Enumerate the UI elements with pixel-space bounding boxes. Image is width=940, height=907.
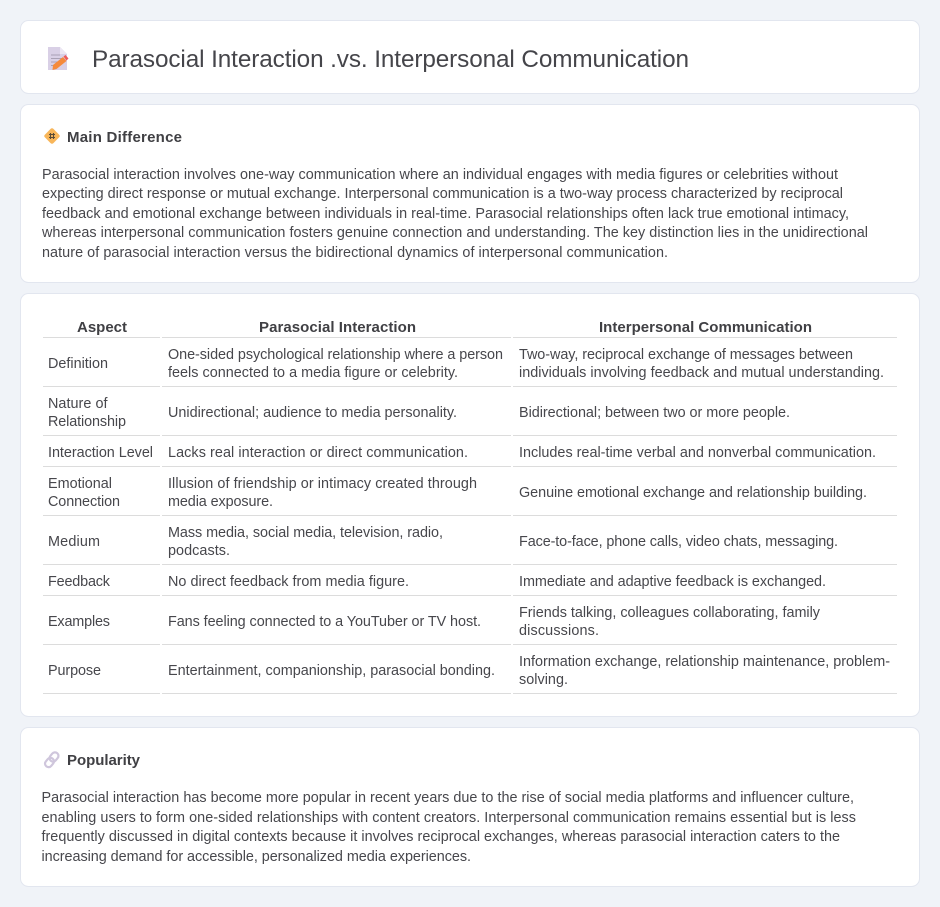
row: emotional connection: media exposure. (168, 494, 273, 510)
text block: main difference paragraph: Parasocial interaction involves one-way communication where an individual engages with media figures or celebrities without (42, 167, 838, 183)
row: definition (48, 347, 884, 381)
row: emotional connection: Illusion of friendship or intimacy created through (168, 476, 477, 492)
text block: main difference paragraph: nature of parasocial interaction versus the bidirectional dynamics of interpersonal communication. (42, 245, 668, 261)
row: purpose: Entertainment, companionship, parasocial bonding. (168, 663, 495, 679)
row: definition: feels connected to a media figure or celebrity. (168, 365, 458, 381)
row: medium: Face-to-face, phone calls, video chats, messaging. (519, 534, 838, 550)
icon: chain link (44, 751, 60, 769)
row: nature of relationship: Nature of (48, 396, 108, 412)
row: definition: individuals involving feedback and mutual understanding. (519, 365, 884, 381)
row: definition: One-sided psychological relationship where a person (168, 347, 503, 363)
row: medium (48, 525, 838, 559)
row: emotional connection: Genuine emotional exchange and relationship building. (519, 485, 867, 501)
row: interaction level: Lacks real interaction or direct communication. (168, 445, 468, 461)
panel: main difference (20, 104, 920, 282)
panel: popularity (20, 728, 920, 886)
row: purpose: solving. (519, 672, 568, 688)
text block: popularity paragraph: Parasocial interaction has become more popular in recent years due to the rise of social media platforms and influencer culture, (42, 790, 854, 806)
row: nature of relationship: Relationship (48, 414, 126, 430)
heading: popularity: Popularity (67, 752, 141, 769)
row: definition: Two-way, reciprocal exchange of messages between (519, 347, 853, 363)
icon: diamond sign (44, 128, 60, 144)
text block: main difference paragraph: expecting direct response or mutual exchange. Interpersonal communication is a two-way process characterized by reciprocal (42, 186, 843, 202)
row: purpose: Purpose (48, 663, 101, 679)
row: examples: Fans feeling connected to a YouTuber or TV host. (168, 614, 481, 630)
text block: popularity paragraph: frequently discussed in digital contexts because it involves reciprocal exchanges, whereas parasocial interaction caters to the (42, 829, 840, 845)
text block: main difference paragraph: feedback and emotional exchange between individuals in real-time. Parasocial relationships often lack true emotional intimacy, (42, 206, 849, 222)
row: medium: Mass media, social media, television, radio, (168, 525, 443, 541)
text block: popularity paragraph: enabling users to form one-sided relationships with content creators. Interpersonal communication remains essential but is less (42, 810, 856, 826)
icon: document with pencil (48, 47, 68, 70)
row: purpose: Information exchange, relationship maintenance, problem- (519, 654, 890, 670)
row: interaction level: Interaction Level (48, 445, 153, 461)
row: interaction level (48, 445, 876, 461)
text block: main difference paragraph (41, 167, 868, 261)
row: feedback: Immediate and adaptive feedback is exchanged. (519, 574, 826, 590)
row: examples (48, 605, 821, 639)
row: definition: Definition (48, 356, 108, 372)
row: feedback: Feedback (48, 574, 111, 590)
row: emotional connection: Connection (48, 494, 120, 510)
row: examples: discussions. (519, 623, 599, 639)
row: interaction level: Includes real-time verbal and nonverbal communication. (519, 445, 876, 461)
row: emotional connection: Emotional (48, 476, 112, 492)
table header row (77, 319, 812, 336)
text block: popularity paragraph: increasing demand for accessible, personalized media experiences. (42, 849, 471, 865)
row: medium: Medium (48, 534, 100, 550)
row: nature of relationship (48, 396, 790, 430)
table header row: Interpersonal Communication (599, 319, 812, 336)
text block: popularity paragraph (42, 790, 856, 865)
row: emotional connection (48, 476, 867, 510)
row: feedback (48, 574, 826, 590)
table header row: Parasocial Interaction (259, 319, 416, 336)
text block: main difference paragraph: whereas interpersonal communication fosters genuine connection and understanding. The key distinction lies in the unidirectional (41, 225, 868, 241)
row: medium: podcasts. (168, 543, 230, 559)
row: purpose (48, 654, 890, 688)
row: examples: Friends talking, colleagues collaborating, family (519, 605, 821, 621)
table header row: Aspect (77, 319, 127, 336)
panel: comparison table (20, 294, 920, 716)
row: feedback: No direct feedback from media figure. (168, 574, 409, 590)
title: Parasocial Interaction .vs. Interpersonal Communication (92, 46, 689, 73)
panel: title header (20, 20, 920, 94)
row: examples: Examples (48, 614, 110, 630)
row: nature of relationship: Unidirectional; audience to media personality. (168, 405, 457, 421)
row: nature of relationship: Bidirectional; between two or more people. (519, 405, 790, 421)
heading: main difference: Main Difference (67, 129, 182, 146)
